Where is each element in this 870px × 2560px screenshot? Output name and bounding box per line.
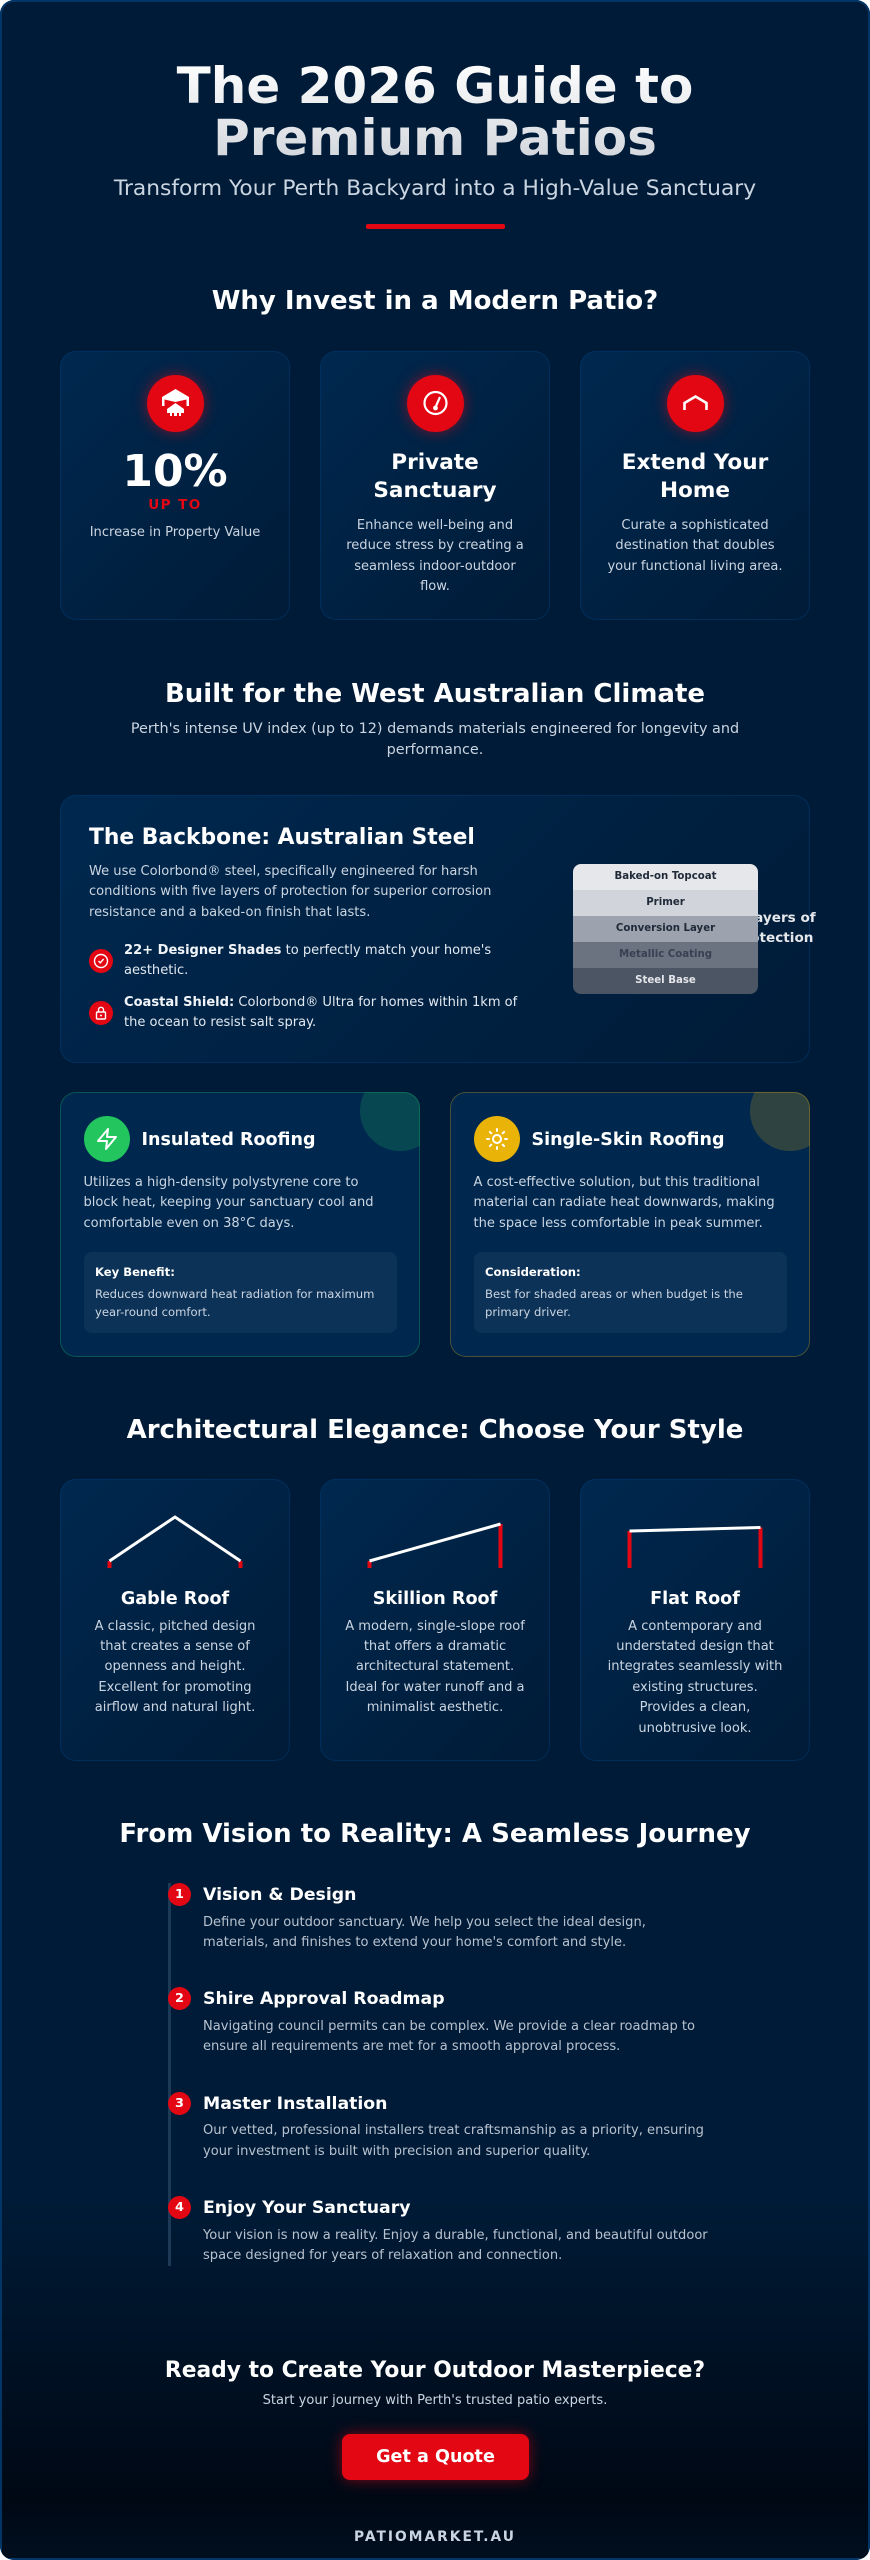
step 1 <box>168 1883 646 1950</box>
call to action <box>165 2358 705 2490</box>
card text: your functional living area. <box>607 559 783 574</box>
panel: australian steel <box>60 795 810 1063</box>
icon: gauge <box>406 375 464 432</box>
card heading: Sanctuary <box>373 478 497 503</box>
step number <box>168 2092 191 2115</box>
step number <box>168 1883 191 1906</box>
step text <box>203 1914 646 1950</box>
card text: A modern, single-slope roof <box>345 1618 525 1634</box>
icon: skillion diagram <box>368 1522 502 1568</box>
step number: 3 <box>175 2096 184 2111</box>
card text <box>84 1175 374 1231</box>
step 4 <box>168 2196 708 2263</box>
heading: climate: Built for the West Australian Climate <box>165 678 705 708</box>
step heading: Vision & Design <box>203 1885 356 1905</box>
step 3 <box>168 2092 704 2159</box>
decorative circle <box>750 1071 830 1151</box>
callout text: primary driver. <box>485 1305 571 1319</box>
card text <box>346 518 524 594</box>
red accent rule <box>366 224 505 229</box>
panel heading: The Backbone: Australian Steel <box>89 825 475 850</box>
card text: destination that doubles <box>615 538 775 553</box>
step number: 2 <box>175 1991 184 2006</box>
stat caption: Increase in Property Value <box>90 524 260 540</box>
cta button: Get a Quote <box>376 2447 495 2467</box>
card heading: Insulated Roofing <box>142 1130 315 1150</box>
card heading <box>622 450 768 503</box>
card text: the space less comfortable in peak summer. <box>474 1216 763 1231</box>
title: Premium Patios <box>213 109 657 167</box>
step text: Define your outdoor sanctuary. We help you select the ideal design, <box>203 1914 646 1930</box>
card heading: Skillion Roof <box>373 1589 497 1609</box>
panel: flat roof <box>580 1479 810 1761</box>
feature: coastal shield <box>124 994 518 1030</box>
layer: metallic <box>573 942 758 968</box>
layer: steel base <box>573 968 758 994</box>
icon: patio house <box>146 375 204 432</box>
step heading: Enjoy Your Sanctuary <box>203 2198 410 2218</box>
panel: insulated roofing <box>60 1092 420 1357</box>
timeline line <box>168 1883 171 2266</box>
step text <box>203 2228 708 2263</box>
cta text: Start your journey with Perth's trusted patio experts. <box>263 2392 607 2408</box>
callout heading: Key Benefit: <box>95 1265 175 1279</box>
card text: minimalist aesthetic. <box>367 1700 503 1715</box>
card text: openness and height. <box>104 1659 246 1674</box>
card text: reduce stress by creating a <box>346 538 524 553</box>
cta heading: Ready to Create Your Outdoor Masterpiece? <box>165 2358 705 2382</box>
header <box>114 57 756 229</box>
heading: why invest: Why Invest in a Modern Patio? <box>212 286 658 316</box>
feature: designer shades <box>124 942 491 978</box>
step number <box>168 2196 191 2219</box>
decorative circle <box>360 1071 440 1151</box>
heading: styles: Architectural Elegance: Choose Your Style <box>127 1414 743 1444</box>
label behind layers <box>731 910 816 946</box>
step text <box>203 2123 704 2159</box>
icon: lock <box>89 1001 113 1025</box>
callout text <box>485 1287 743 1319</box>
card heading: Flat Roof <box>650 1589 740 1609</box>
step text: Navigating council permits can be complex. We provide a clear roadmap to <box>203 2019 695 2034</box>
card text: Excellent for promoting <box>98 1680 252 1695</box>
step text: Our vetted, professional installers treat craftsmanship as a priority, ensuring <box>203 2123 704 2138</box>
callout heading: Consideration: <box>485 1265 581 1279</box>
layer: primer <box>573 890 758 916</box>
feature: coastal shield: the ocean to resist salt spray. <box>124 1015 316 1030</box>
card text: flow. <box>420 579 450 594</box>
feature: designer shades: 22+ Designer Shades to perfectly match your home's <box>124 942 491 958</box>
card text: Enhance well-being and <box>357 518 513 533</box>
card text: existing structures. <box>632 1680 758 1695</box>
stat label: up to: UP TO <box>148 497 202 513</box>
card text: comfortable even on 38°C days. <box>84 1216 294 1231</box>
step number: 4 <box>175 2200 184 2215</box>
card text: Utilizes a high-density polystyrene core to <box>84 1175 358 1190</box>
icon: flat diagram <box>628 1526 762 1568</box>
card text: A contemporary and <box>628 1618 762 1634</box>
title: The 2026 Guide to <box>177 57 693 115</box>
card text: that creates a sense of <box>100 1639 250 1654</box>
card text: seamless indoor-outdoor <box>354 559 516 574</box>
card text: architectural statement. <box>356 1659 514 1674</box>
panel: extend your home <box>580 351 810 620</box>
icon: sun <box>474 1116 520 1162</box>
step number <box>168 1987 191 2010</box>
step heading: Shire Approval Roadmap <box>203 1989 445 2009</box>
icon: roof arch <box>666 375 724 432</box>
card heading: Private <box>391 450 479 475</box>
step text: ensure all requirements are met for a smooth approval process. <box>203 2039 620 2054</box>
icon: gable diagram <box>108 1515 242 1568</box>
layer: steel base: Steel Base <box>635 975 696 986</box>
panel: private sanctuary <box>320 351 550 620</box>
panel text: We use Colorbond® steel, specifically engineered for harsh <box>89 864 478 879</box>
feature: designer shades: aesthetic. <box>124 963 188 978</box>
step text: materials, and finishes to extend your home's comfort and style. <box>203 1935 626 1950</box>
step text <box>203 2019 695 2054</box>
panel: single-skin roofing <box>450 1092 810 1357</box>
card text <box>607 518 783 574</box>
step text: your investment is built with precision and superior quality. <box>203 2144 590 2159</box>
title <box>0 60 870 164</box>
callout: key benefit <box>84 1252 396 1333</box>
card heading: Home <box>660 478 730 503</box>
callout text: Best for shaded areas or when budget is the <box>485 1287 743 1301</box>
climate intro text: Perth's intense UV index (up to 12) demands materials engineered for longevity and <box>131 720 739 736</box>
card text: block heat, keeping your sanctuary cool and <box>84 1195 374 1210</box>
step text: Your vision is now a reality. Enjoy a durable, functional, and beautiful outdoor <box>203 2228 708 2243</box>
climate intro text <box>131 720 739 758</box>
card text: A classic, pitched design <box>95 1618 255 1634</box>
steel layers diagram <box>573 864 758 994</box>
card text: Curate a sophisticated <box>621 518 769 533</box>
layer: topcoat: Baked-on Topcoat <box>614 870 717 882</box>
step number: 1 <box>175 1887 184 1902</box>
layer: conversion: Conversion Layer <box>616 923 715 934</box>
callout: consideration <box>474 1252 786 1333</box>
timeline <box>168 1883 708 2266</box>
layer: metallic: Metallic Coating <box>619 949 712 960</box>
callout text: year-round comfort. <box>95 1305 211 1319</box>
card text: Ideal for water runoff and a <box>345 1680 525 1695</box>
card heading <box>373 450 497 503</box>
layer: topcoat <box>573 864 758 890</box>
stat: 10%: 10% <box>122 446 228 497</box>
card text: A cost-effective solution, but this traditional <box>474 1175 760 1190</box>
card text: unobtrusive look. <box>638 1721 752 1736</box>
panel: property value <box>60 351 290 620</box>
step 2 <box>168 1987 695 2054</box>
panel text: conditions with five layers of protection for superior corrosion <box>89 884 491 899</box>
climate intro text: performance. <box>387 742 483 758</box>
step text: space designed for years of relaxation and connection. <box>203 2248 562 2263</box>
layer: primer: Primer <box>646 897 685 908</box>
panel text: resistance and a baked-on finish that lasts. <box>89 905 370 920</box>
icon: shades <box>89 949 113 973</box>
step heading: Master Installation <box>203 2094 387 2114</box>
card heading: Extend Your <box>622 450 768 475</box>
card heading: Single-Skin Roofing <box>532 1130 724 1150</box>
card text <box>345 1618 526 1715</box>
layer: conversion <box>573 916 758 942</box>
card text: material can radiate heat downwards, making <box>474 1195 775 1210</box>
card text: Provides a clean, <box>640 1700 750 1715</box>
card heading: Gable Roof <box>121 1589 229 1609</box>
label behind layers: 5 Layers of <box>731 910 816 926</box>
card text <box>474 1175 775 1231</box>
card text <box>94 1618 255 1715</box>
panel: skillion roof <box>320 1479 550 1761</box>
callout text <box>95 1287 374 1319</box>
card text <box>608 1618 782 1736</box>
icon: bolt <box>84 1116 130 1162</box>
card text: understated design that <box>616 1639 774 1654</box>
panel: gable roof <box>60 1479 290 1761</box>
label behind layers: Protection <box>734 930 813 946</box>
subtitle: Transform Your Perth Backyard into a High-Value Sanctuary <box>114 176 756 200</box>
card text: that offers a dramatic <box>364 1639 506 1654</box>
card text: airflow and natural light. <box>95 1700 255 1715</box>
panel text <box>89 864 491 920</box>
heading: journey: From Vision to Reality: A Seamless Journey <box>119 1819 751 1849</box>
cta button <box>342 2434 529 2480</box>
card text: integrates seamlessly with <box>608 1659 782 1674</box>
feature: coastal shield: Coastal Shield: Colorbond® Ultra for homes within 1km of <box>124 994 517 1010</box>
callout text: Reduces downward heat radiation for maximum <box>95 1287 374 1301</box>
footer brand: PATIOMARKET.AU <box>354 2529 516 2545</box>
